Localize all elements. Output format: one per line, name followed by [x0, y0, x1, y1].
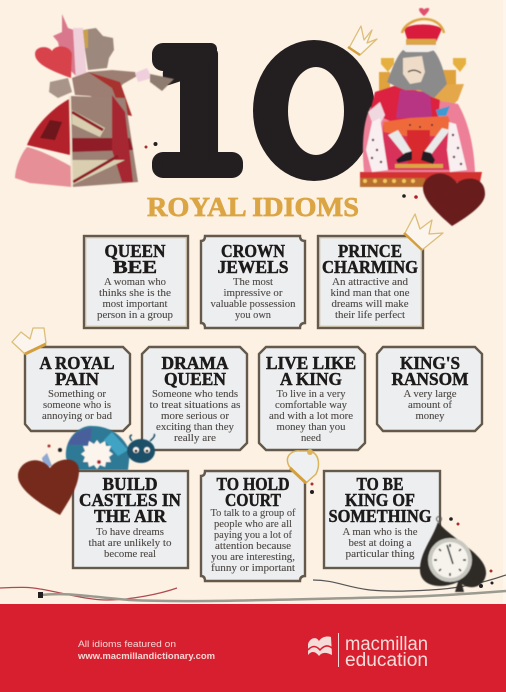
- macmillan education logo: education: [345, 650, 428, 671]
- card: prince charming: PRINCE: [338, 241, 402, 261]
- title: ROYAL IDIOMS: [147, 192, 359, 222]
- card: a royal pain: Something or: [48, 389, 106, 400]
- icon: spade with clock: [420, 516, 486, 592]
- card: prince charming: dreams will make: [332, 299, 409, 310]
- heart: dark red: [423, 174, 485, 226]
- icon: crown above zero: [348, 26, 377, 55]
- card: prince charming: An attractive and: [332, 277, 409, 288]
- card: king's ransom: money: [416, 411, 445, 422]
- card: crown jewels: CROWN: [221, 241, 285, 261]
- card: crown jewels: JEWELS: [218, 257, 288, 277]
- icon: crown on prince card: [404, 214, 443, 250]
- card: drama queen: really are: [174, 433, 216, 444]
- card: to hold court: people who are all: [214, 519, 292, 530]
- card: drama queen: DRAMA: [162, 353, 229, 373]
- card: to hold court: [201, 471, 305, 581]
- card: build castles in the air: that are unlikely to: [88, 538, 172, 549]
- card: drama queen: Someone who tends: [152, 389, 238, 400]
- icon: crown on royal pain card: [12, 328, 46, 354]
- card: build castles in the air: To have dreams: [96, 527, 164, 538]
- illustration: caterpillar: [42, 426, 155, 470]
- card: prince charming: CHARMING: [322, 257, 418, 277]
- card: live like a king: and with a lot more: [269, 411, 353, 422]
- dots near the king: [402, 194, 418, 199]
- card: drama queen: to treat situations as: [150, 400, 240, 411]
- card: a royal pain: PAIN: [55, 369, 99, 389]
- dots near the queen: [144, 142, 158, 148]
- macmillan education logo: [308, 633, 428, 671]
- card: to be king of something: KING OF: [345, 490, 415, 510]
- card: queen bee: A woman who: [104, 277, 166, 288]
- card: live like a king: LIVE LIKE: [266, 353, 356, 373]
- footer text: www.macmillandictionary.com: [77, 651, 215, 662]
- card: live like a king: money than you: [276, 422, 346, 433]
- card: crown jewels: valuable possession: [210, 299, 296, 310]
- card: queen bee: person in a group: [97, 310, 173, 321]
- card: queen bee: [84, 236, 188, 328]
- card: to be king of something: particular thing: [346, 549, 415, 560]
- icon: diamond ring: [287, 449, 318, 483]
- card: king's ransom: RANSOM: [392, 369, 469, 389]
- card: build castles in the air: THE AIR: [94, 506, 166, 526]
- card: king's ransom: A very large: [404, 389, 457, 400]
- card: live like a king: comfortable way: [275, 400, 348, 411]
- card: a royal pain: A ROYAL: [40, 353, 114, 373]
- card: to be king of something: A man who is the: [342, 527, 418, 538]
- illustration: queen of hearts: [15, 14, 174, 187]
- card: king's ransom: amount of: [408, 400, 452, 411]
- card: king's ransom: [377, 347, 482, 431]
- card: to be king of something: [324, 471, 440, 568]
- card: to be king of something: best at doing a: [348, 538, 412, 549]
- card: a royal pain: someone who is: [43, 400, 111, 411]
- illustration: king on throne: [360, 8, 482, 187]
- card: to hold court: TO HOLD: [216, 474, 290, 494]
- card: queen bee: QUEEN: [104, 241, 166, 261]
- footer text: [77, 639, 215, 662]
- card: live like a king: [259, 347, 365, 450]
- card: to be king of something: SOMETHING: [328, 506, 432, 526]
- card: queen bee: thinks she is the: [99, 288, 171, 299]
- card: build castles in the air: BUILD: [102, 474, 158, 494]
- dots near the clock: [449, 517, 494, 588]
- footer band: [0, 604, 506, 692]
- card: prince charming: their life perfect: [335, 310, 405, 321]
- card: live like a king: A KING: [280, 369, 342, 389]
- card: drama queen: QUEEN: [164, 369, 226, 389]
- card: crown jewels: The most: [233, 277, 273, 288]
- card: crown jewels: [201, 236, 305, 328]
- card: a royal pain: annoying or bad: [42, 411, 113, 422]
- heart: brown: [18, 460, 79, 515]
- card: drama queen: [142, 347, 247, 450]
- card: crown jewels: you own: [235, 310, 272, 321]
- card: to hold court: To talk to a group of: [210, 508, 296, 519]
- card: drama queen: exciting than they: [156, 422, 235, 433]
- big number 10: [152, 9, 375, 216]
- card: to hold court: COURT: [225, 490, 281, 510]
- footer text: All idioms featured on: [78, 639, 176, 650]
- card: build castles in the air: become real: [104, 549, 156, 560]
- card: live like a king: To live in a very: [276, 389, 346, 400]
- dots near the ring: [310, 482, 314, 494]
- card: live like a king: need: [301, 433, 322, 444]
- card: drama queen: more serious or: [161, 411, 229, 422]
- card: prince charming: kind man that one: [330, 288, 410, 299]
- big number 10: 1: [154, 12, 242, 210]
- card: queen bee: BEE: [113, 257, 157, 277]
- card: to hold court: attention because: [215, 541, 291, 552]
- card: to hold court: paying you a lot of: [214, 530, 292, 541]
- decorative strings: [0, 575, 506, 601]
- card: build castles in the air: [73, 471, 188, 568]
- card: prince charming: [318, 236, 423, 328]
- card: build castles in the air: CASTLES IN: [79, 490, 181, 510]
- card: to hold court: funny or important: [211, 563, 295, 574]
- macmillan education logo: macmillan: [345, 634, 428, 655]
- card: crown jewels: impressive or: [224, 288, 283, 299]
- card: to hold court: you are interesting,: [211, 552, 295, 563]
- card: king's ransom: KING'S: [400, 353, 460, 373]
- card: a royal pain: [25, 347, 130, 431]
- big number 10: 0: [255, 9, 373, 216]
- card: queen bee: most important: [102, 299, 168, 310]
- card: to be king of something: TO BE: [356, 474, 404, 494]
